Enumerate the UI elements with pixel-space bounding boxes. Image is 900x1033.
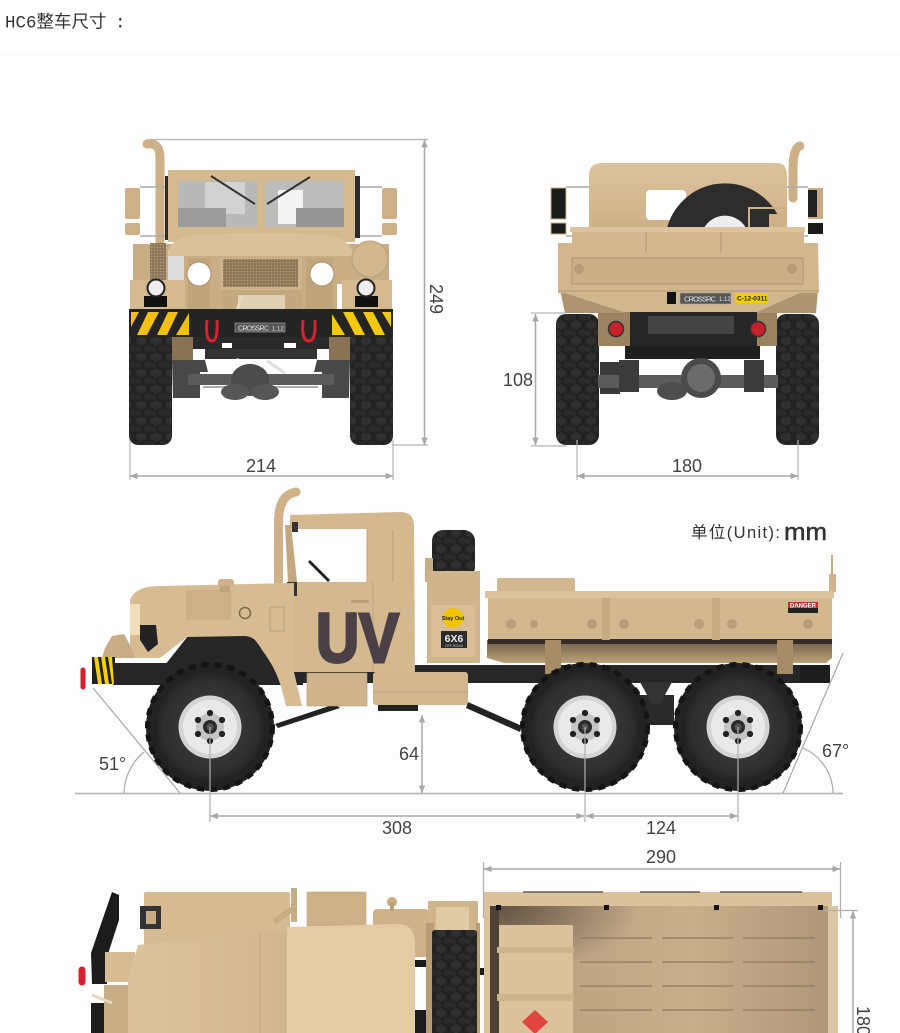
- dimension: 180: 180: [672, 456, 702, 476]
- dimension: 108: [503, 313, 566, 446]
- rear chassis: [598, 310, 778, 400]
- bumper shackles: [207, 320, 315, 341]
- side view truck: [83, 492, 836, 791]
- cab and windshield: [165, 170, 360, 242]
- spare tire carrier: OFF-ROAD: [445, 644, 464, 648]
- front view truck: [125, 144, 397, 445]
- side tank top: [373, 897, 429, 957]
- side storage box: [307, 673, 367, 706]
- spare tire carrier: [425, 558, 480, 663]
- rear plates: [667, 292, 768, 304]
- black tow block: [140, 625, 158, 652]
- rear of cab: [589, 163, 787, 232]
- red tail lights: [608, 322, 766, 336]
- approach angle 51: 51°: [99, 754, 126, 774]
- chassis rail: [113, 663, 830, 732]
- fuel tank on hood: [186, 579, 284, 631]
- red shackle: [80, 670, 86, 687]
- cab: [285, 512, 415, 672]
- unit label: mm: [784, 519, 827, 546]
- hood and front fender side: [130, 583, 302, 706]
- spare tire holder: [426, 901, 480, 1033]
- dimension: wheelbase 308: 308: [382, 818, 412, 838]
- bumper plate: 1:12: [272, 326, 284, 332]
- cab door handle: [351, 600, 369, 603]
- hazard diamond: [522, 1010, 548, 1033]
- dimension: bed width 180: [823, 910, 873, 1033]
- headlight: [130, 604, 140, 635]
- front bumper: [129, 309, 393, 337]
- fuel tank: [373, 672, 468, 711]
- spot lights: [144, 280, 378, 307]
- bumper plate: [235, 323, 285, 332]
- middle wheel: [521, 663, 649, 791]
- dimension: 108: 108: [503, 370, 533, 390]
- rear plates: 1:12: [719, 297, 731, 303]
- storage box top: [497, 925, 574, 1033]
- exhaust stack: [147, 144, 160, 242]
- ground line: [75, 792, 843, 794]
- hood top: [128, 932, 287, 1033]
- mirrors: [125, 187, 397, 236]
- winch drum: [222, 290, 302, 333]
- top side box: [307, 892, 366, 926]
- departure angle 67: 67°: [822, 741, 849, 761]
- front bumper: [82, 952, 135, 1033]
- UV lettering: UV: [316, 599, 399, 677]
- engine body sides: [133, 243, 389, 284]
- rear mirrors: [551, 187, 823, 236]
- hood: [168, 233, 353, 256]
- spare wheel: [667, 183, 785, 228]
- cargo bed side: [485, 555, 836, 674]
- truck bed rear: [558, 227, 819, 313]
- rear cab top panel: [144, 892, 290, 952]
- top view truck: [82, 888, 838, 1033]
- mirror top: [140, 906, 161, 929]
- spare tire carrier: 6X6: [445, 633, 463, 645]
- unit label: [691, 519, 827, 546]
- danger sign: [788, 602, 818, 613]
- dimension: bed length 290: [484, 847, 840, 918]
- bumper stripes side: [92, 657, 115, 684]
- right side tank: [352, 241, 388, 277]
- bumper plate: CROSSRC: [238, 326, 269, 332]
- departure angle 67: [783, 653, 849, 793]
- front tires: [129, 330, 393, 445]
- rear plates: C-12-0311: [737, 296, 768, 302]
- front plow guard: [91, 892, 119, 984]
- dimension: 180: [577, 440, 798, 480]
- fenders: [130, 280, 392, 310]
- unit label: 单位(Unit):: [691, 523, 780, 542]
- front wheel: [146, 663, 274, 791]
- grille: [185, 256, 337, 310]
- rear view truck: [551, 146, 823, 445]
- rear wheel: [674, 663, 802, 791]
- danger sign: DANGER: [790, 604, 817, 610]
- title: :: [115, 14, 126, 34]
- spare tire carrier: Stay Out: [442, 616, 464, 622]
- exhaust stack side: [278, 492, 296, 582]
- dimension: width 214: 214: [246, 456, 276, 476]
- dimension: ground clearance 64: 64: [399, 744, 419, 764]
- dimension: bed length 290: 290: [646, 847, 676, 867]
- dimension: height 249: 249: [426, 284, 446, 314]
- hood seam: [259, 932, 261, 1033]
- stack: [793, 146, 800, 198]
- cab roof top: [287, 924, 415, 1033]
- rear plates: CROSSRC: [684, 294, 717, 304]
- approach angle 51: [93, 688, 180, 793]
- dimension: axle spacing 124: 124: [646, 818, 676, 838]
- frame crossmembers: [415, 960, 484, 1033]
- dimension: width 214: [130, 440, 393, 480]
- floor ribs: [580, 938, 815, 1010]
- spare tire top: [432, 930, 477, 1033]
- dimension: ground clearance 64: [399, 715, 422, 793]
- exhaust top: [274, 888, 294, 922]
- wheel arch interior: [165, 636, 272, 665]
- spare wheel side: [432, 530, 475, 578]
- cab rear window: [646, 190, 686, 220]
- dimension: wheelbase 308: [210, 727, 585, 838]
- winch side: [102, 634, 135, 658]
- cargo bed: [484, 892, 838, 1033]
- rear tires: [556, 314, 819, 445]
- title: HC6整车尺寸: [5, 14, 107, 34]
- front axle and suspension: [172, 337, 350, 400]
